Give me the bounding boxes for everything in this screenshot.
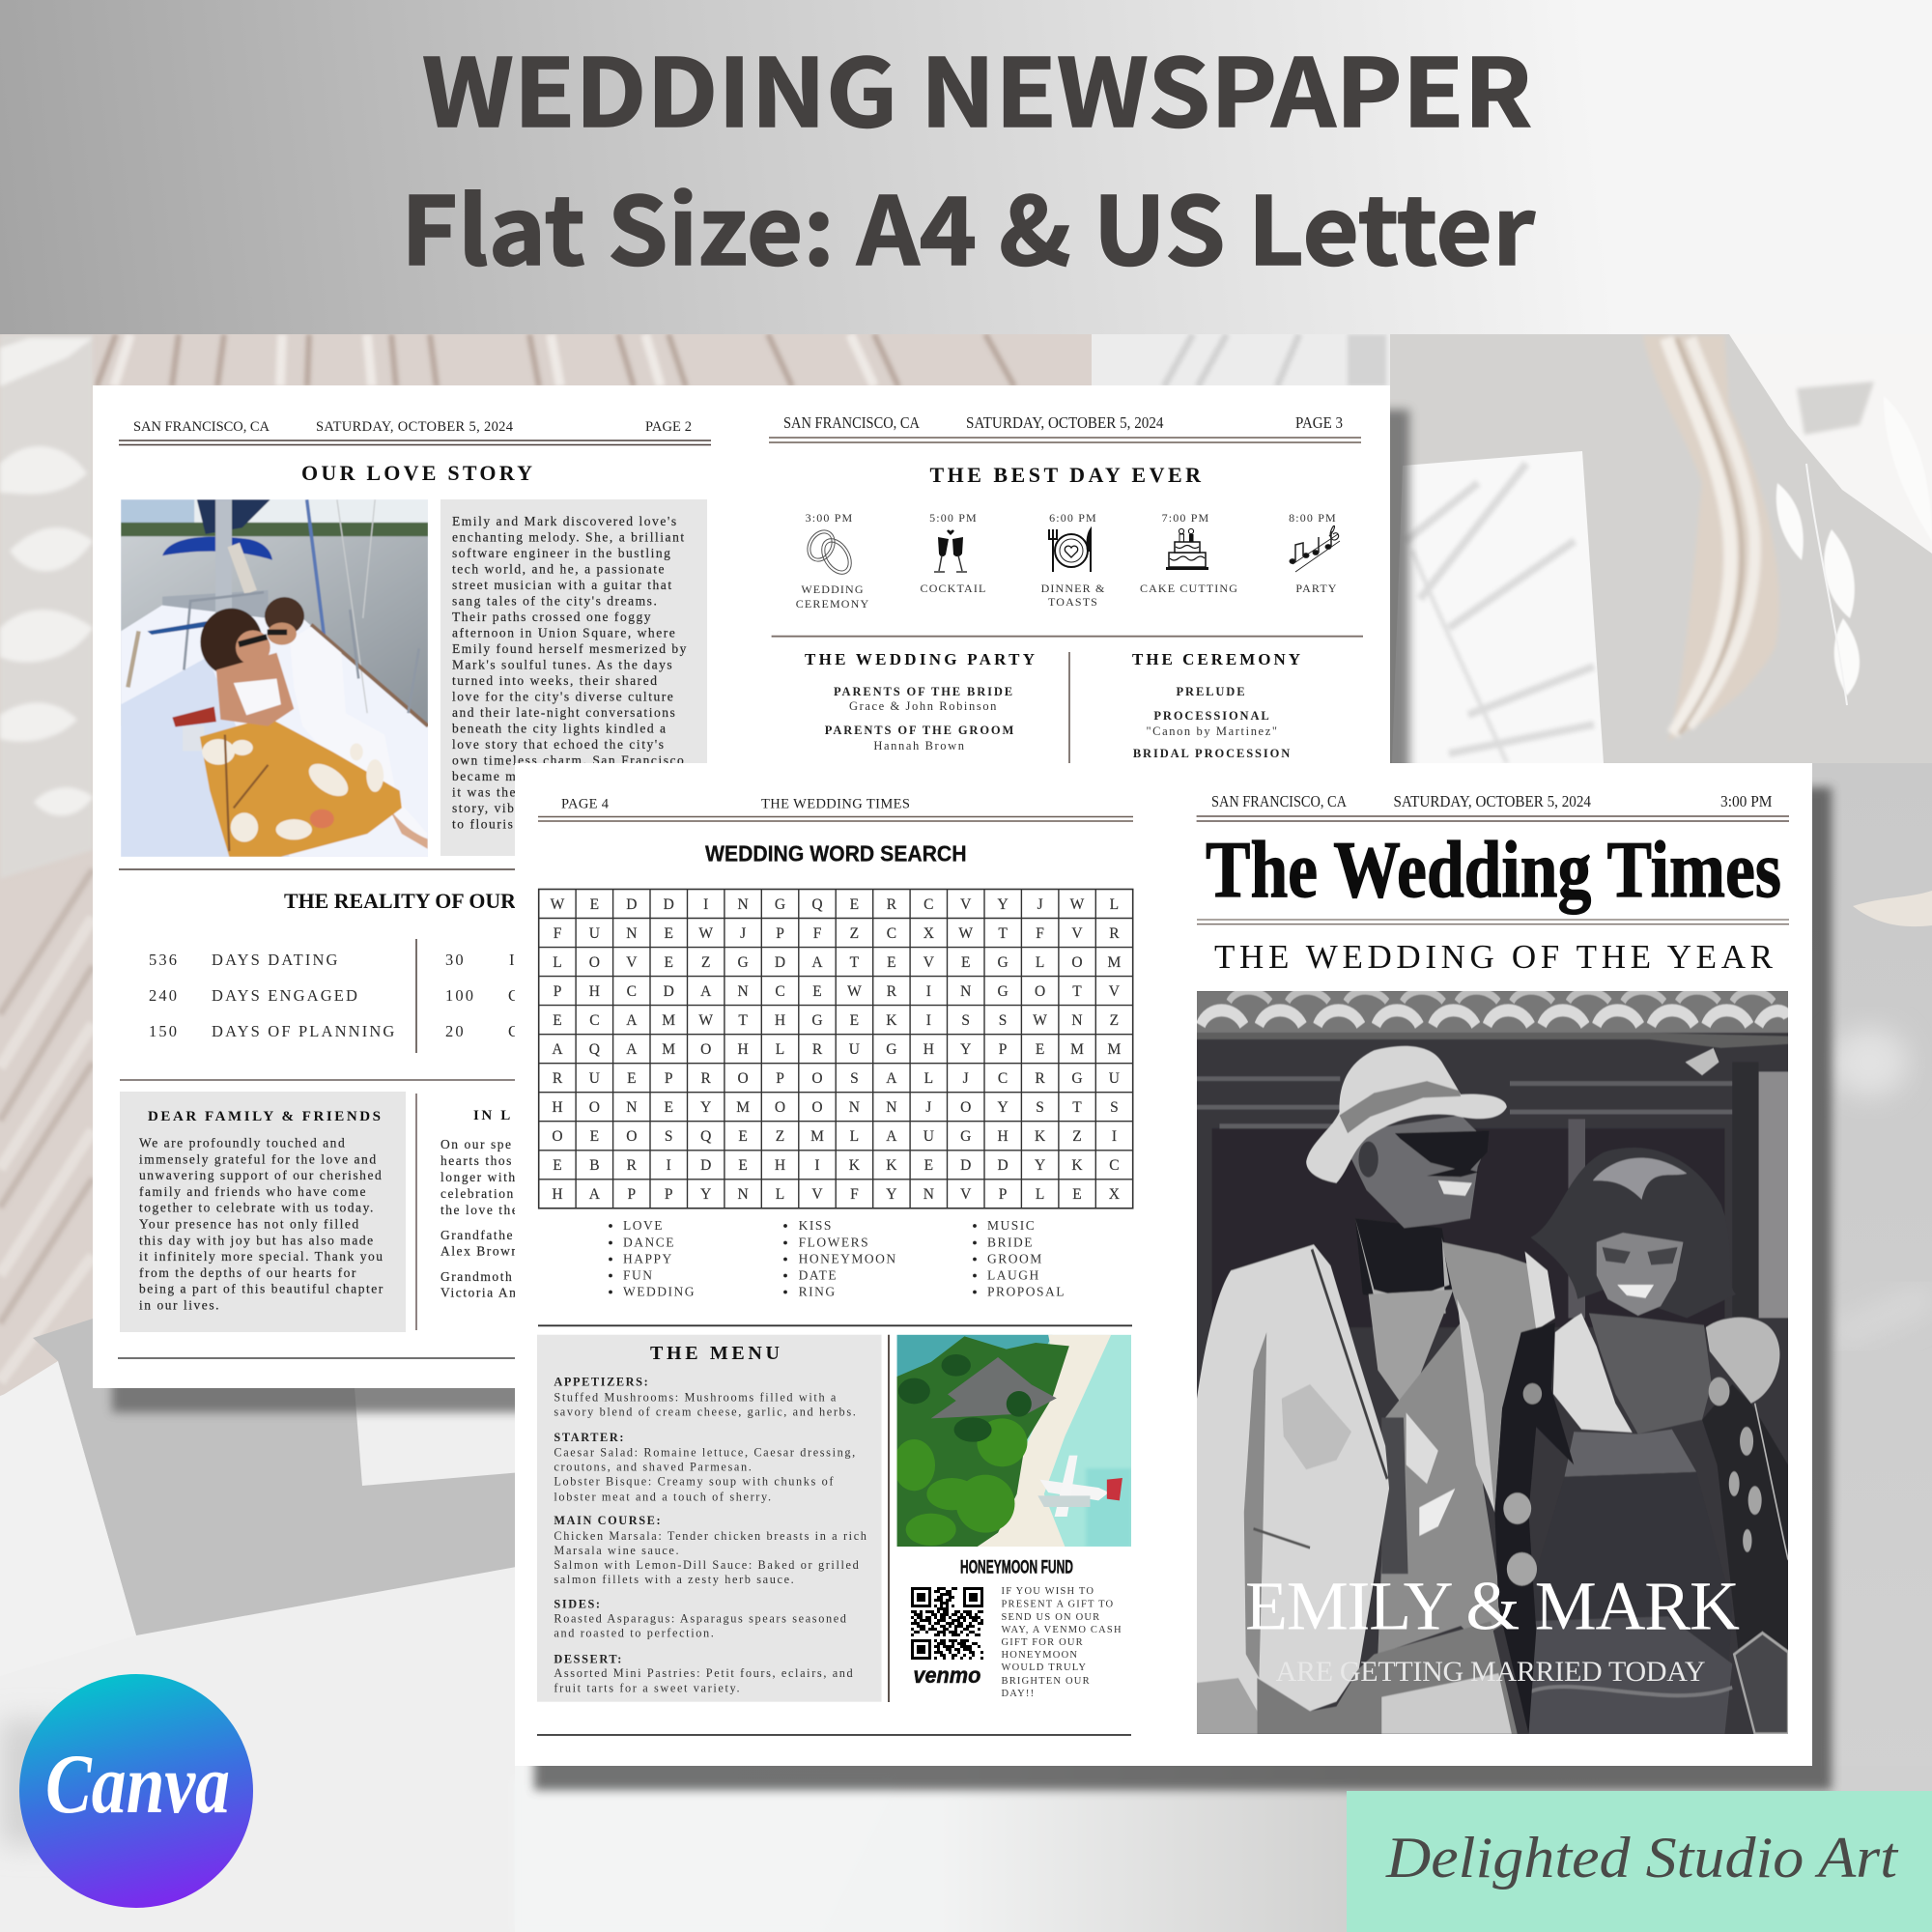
timeline: PARTY — [1295, 582, 1338, 595]
word search grid: HONEYMOONNJOYSTS — [552, 1099, 1119, 1116]
panel: the menu: lobster meat and a touch of sherry. — [554, 1490, 773, 1503]
panel: the menu: Assorted Mini Pastries: Petit fours, eclairs, and — [554, 1666, 854, 1680]
panel: dear family and friends: family and friends who have come — [139, 1184, 367, 1199]
honeymoon fund note: DAY!! — [1001, 1689, 1035, 1699]
timeline: 3:00 PM — [806, 511, 853, 525]
text block: love story: Emily found herself mesmerized by — [452, 641, 688, 656]
page 4 header — [538, 797, 1133, 821]
lower left gray card — [33, 1319, 522, 1635]
page 2 header — [119, 419, 711, 444]
panel: the menu: Stuffed Mushrooms: Mushrooms filled with a — [554, 1390, 838, 1404]
woman's hair — [1530, 1148, 1736, 1318]
honeymoon fund note: WOULD TRULY — [1001, 1662, 1087, 1673]
text block: love story: turned into weeks, their shared — [452, 673, 659, 688]
page 3 header — [769, 413, 1361, 442]
snack tray — [172, 706, 216, 726]
panel: the ceremony: "Canon by Martinez" — [1146, 724, 1279, 738]
panel: the menu: STARTER: — [554, 1431, 625, 1444]
panel: the ceremony: PRELUDE — [1177, 685, 1246, 698]
text block: love story: tech world, and he, a passionate — [452, 562, 666, 576]
woman — [200, 609, 263, 675]
word list: HAPPY — [623, 1251, 673, 1265]
panel: the wedding party: THE WEDDING PARTY — [805, 650, 1035, 668]
page 2 header: PAGE 2 — [645, 419, 692, 435]
panel: the wedding party — [805, 650, 1035, 753]
dress — [1565, 1430, 1696, 1477]
text block: love story — [440, 499, 707, 856]
word search grid: AQAMOHLRUGHYPEMM — [552, 1041, 1122, 1058]
panel: the menu: and roasted to perfection. — [554, 1627, 715, 1640]
beige palm silk — [0, 334, 1092, 1396]
panel: dear family and friends: together to celebrate with us today. — [139, 1201, 375, 1215]
timeline — [796, 511, 1340, 611]
honeymoon fund note: WAY, A VENMO CASH — [1001, 1625, 1122, 1635]
shirt — [1355, 1218, 1450, 1313]
panel: dear family and friends: this day with joy but has also made — [139, 1233, 375, 1247]
roof tiles — [1197, 991, 1788, 1033]
stats list: 240 — [149, 986, 179, 1005]
word list: DANCE — [623, 1236, 675, 1250]
word search grid: ECAMWTHGEKISSWNZ — [553, 1012, 1119, 1029]
panel: dear family and friends: unwavering support of our cherished — [139, 1168, 383, 1182]
text block: love story: and their late-night conversations — [452, 705, 676, 720]
text block: love story: Emily and Mark discovered love's — [452, 514, 678, 528]
honeymoon fund note: IF YOU WISH TO — [1001, 1586, 1094, 1597]
panel: the wedding party: PARENTS OF THE GROOM — [825, 724, 1015, 737]
in loving memory column: hearts thos — [440, 1153, 513, 1168]
page 1 header — [1197, 792, 1789, 821]
hat — [1306, 1046, 1507, 1183]
icon: dinner plate — [1049, 529, 1091, 572]
panel: the menu: fruit tarts for a sweet variety. — [554, 1682, 741, 1695]
trousers — [1257, 1621, 1518, 1734]
doorway — [1212, 1128, 1724, 1327]
face — [1597, 1233, 1683, 1316]
stats list: C — [508, 1022, 521, 1040]
text block: love story: became m — [452, 769, 517, 783]
stats list: 536 — [149, 951, 179, 969]
shadow: back spread — [112, 410, 1409, 1412]
text block: love story: own timeless charm. San Francisco — [452, 753, 685, 767]
timeline: 8:00 PM — [1289, 511, 1337, 525]
word list: MUSIC — [987, 1218, 1036, 1233]
text block: love story: it was the — [452, 784, 517, 800]
white paper with palm shadow — [1392, 451, 1604, 763]
panel: dear family and friends — [120, 1092, 406, 1332]
page 3 header: SATURDAY, OCTOBER 5, 2024 — [966, 413, 1163, 432]
text block: love story: love for the city's diverse culture — [452, 690, 674, 703]
stats list: 100 — [445, 986, 475, 1005]
stats list: DAYS OF PLANNING — [212, 1022, 396, 1040]
panel: the menu: Caesar Salad: Romaine lettuce, Caesar dressing, — [554, 1446, 857, 1460]
panel: the menu: savory blend of cream cheese, garlic, and herbs. — [554, 1406, 857, 1419]
timeline: 6:00 PM — [1049, 511, 1097, 525]
panel: the ceremony — [1132, 650, 1300, 760]
panel: the menu: APPETIZERS: — [554, 1375, 649, 1388]
word search grid: EBRIDEHIKKEDDYKC — [553, 1157, 1120, 1174]
icon: music notes — [1290, 526, 1340, 572]
chest — [1589, 1313, 1712, 1435]
heading: flat size: Flat Size: A4 & US Letter — [401, 156, 1536, 292]
honeymoon fund note: GIFT FOR OUR — [1001, 1637, 1084, 1648]
word list: PROPOSAL — [987, 1285, 1065, 1298]
white leaves at left — [0, 334, 93, 879]
headline: the wedding of the year: THE WEDDING OF THE YEAR — [1214, 938, 1774, 976]
text block: love story: enchanting melody. She, a brilliant — [452, 529, 686, 545]
dried feather — [1643, 335, 1779, 741]
page 2 header: SAN FRANCISCO, CA — [133, 419, 270, 435]
panel: dear family and friends: being a part of this beautiful chapter — [139, 1282, 384, 1296]
word list: GROOM — [987, 1251, 1043, 1265]
word list: BRIDE — [987, 1236, 1034, 1250]
text block: love story: Their paths crossed one foggy — [452, 610, 652, 624]
panel: the wedding party: PARENTS OF THE BRIDE — [834, 685, 1014, 698]
heading: wedding word search: WEDDING WORD SEARCH — [705, 840, 966, 866]
logo: Canva circle — [19, 1674, 253, 1908]
top title band — [0, 0, 1932, 334]
timeline: 7:00 PM — [1162, 511, 1209, 525]
in loving memory column: IN L — [473, 1108, 513, 1123]
honeymoon fund note: PRESENT A GIFT TO — [1001, 1599, 1114, 1609]
text block: love story: afternoon in Union Square, where — [452, 626, 676, 639]
word list: FUN — [623, 1268, 654, 1283]
panel: the wedding party: Grace & John Robinson — [849, 699, 998, 713]
photo: couple on a sailboat — [121, 499, 428, 857]
stats list — [149, 939, 521, 1053]
word search grid: PHCDANCEWRINGOTV — [554, 983, 1121, 1000]
logo: Canva circle: Canva — [45, 1738, 230, 1832]
panel: dear family and friends: in our lives. — [139, 1298, 220, 1312]
page 2 header: SATURDAY, OCTOBER 5, 2024 — [316, 419, 514, 435]
overlay title: Emily & Mark: EMILY & MARK — [1245, 1568, 1740, 1645]
panel: the wedding party: Hannah Brown — [873, 739, 966, 753]
panel: the menu: croutons, and shaved Parmesan. — [554, 1461, 753, 1474]
stats list: C — [508, 986, 521, 1005]
honeymoon fund note — [1001, 1586, 1122, 1699]
top middle pale wall with shadow — [1092, 334, 1401, 392]
timeline: TOASTS — [1048, 595, 1098, 609]
timeline: 5:00 PM — [929, 511, 978, 525]
word list: DATE — [799, 1268, 838, 1283]
venmo logo: venmo — [913, 1662, 980, 1688]
panel: dear family and friends: We are profoundly touched and — [139, 1136, 346, 1150]
panel: the menu: Roasted Asparagus: Asparagus spears seasoned — [554, 1611, 848, 1625]
photo: island beach with seaplane — [894, 1335, 1132, 1548]
icon: champagne glasses — [934, 529, 967, 572]
masthead: the wedding times: The Wedding Times — [1206, 825, 1781, 915]
panel: the menu: SIDES: — [554, 1597, 602, 1610]
in loving memory column: celebration — [440, 1186, 515, 1201]
page 3 header: PAGE 3 — [1295, 413, 1343, 432]
timeline: WEDDING — [801, 582, 865, 596]
page 3 header: SAN FRANCISCO, CA — [783, 413, 920, 432]
word list — [609, 1218, 1065, 1298]
bottom strip — [515, 1766, 1932, 1932]
word search grid: RUEPROPOSALJCRGU — [553, 1070, 1120, 1087]
icon: wedding rings — [802, 526, 858, 580]
panel: the ceremony: BRIDAL PROCESSION — [1133, 747, 1292, 760]
panel: the menu: MAIN COURSE: — [554, 1514, 662, 1527]
heading: the reality of our: THE REALITY OF OUR — [284, 889, 517, 913]
text block: love story: story, vib — [452, 801, 515, 815]
word list: FLOWERS — [799, 1236, 869, 1250]
page 4 header: PAGE 4 — [561, 797, 610, 812]
honeymoon fund note: SEND US ON OUR — [1001, 1612, 1100, 1623]
heading: honeymoon fund: HONEYMOON FUND — [960, 1558, 1073, 1578]
stats list: DAYS DATING — [212, 951, 340, 969]
panel: the ceremony: THE CEREMONY — [1132, 650, 1300, 668]
QR code — [911, 1588, 983, 1658]
word list: RING — [799, 1285, 837, 1298]
word list: LAUGH — [987, 1268, 1040, 1283]
text block: love story: software engineer in the bustling — [452, 546, 671, 560]
heading: our love story: OUR LOVE STORY — [301, 461, 532, 485]
word search grid: WEDDINGQERCVYJWL — [551, 896, 1119, 913]
panel: the menu — [537, 1335, 881, 1702]
word list: WEDDING — [623, 1285, 696, 1298]
text block: love story: sang tales of the city's dreams. — [452, 593, 658, 609]
panel: dear family and friends: immensely grateful for the love and — [139, 1151, 378, 1166]
panel: dear family and friends: it infinitely more special. Thank you — [139, 1249, 384, 1264]
text block: love story: love story that echoed the city's — [452, 737, 665, 752]
seaplane — [1039, 1480, 1109, 1500]
text block: love story: street musician with a guitar that — [452, 578, 673, 592]
gray wall right — [1390, 334, 1932, 769]
white upper right area — [1729, 334, 1932, 554]
logo: Delighted Studio Art badge — [1347, 1791, 1932, 1932]
logo: Delighted Studio Art badge: Delighted Studio Art — [1385, 1826, 1898, 1889]
stats list: 150 — [149, 1022, 179, 1040]
in loving memory column: Alex Brown — [440, 1244, 520, 1258]
photo: black and white couple cover — [1197, 991, 1788, 1734]
panel: dear family and friends: from the depths of our hearts for — [139, 1265, 357, 1280]
honeymoon fund note: HONEYMOON — [1001, 1650, 1078, 1661]
timeline: CAKE CUTTING — [1140, 582, 1238, 595]
honeymoon fund note: BRIGHTEN OUR — [1001, 1676, 1091, 1687]
panel: the menu: salmon fillets with a zesty herb sauce. — [554, 1573, 795, 1586]
page 1 header: 3:00 PM — [1720, 792, 1773, 810]
icon: wedding cake — [1166, 528, 1208, 570]
stats list: 20 — [445, 1022, 466, 1040]
stats list: I — [509, 951, 517, 969]
page 4 header: THE WEDDING TIMES — [761, 797, 910, 812]
clutch — [1734, 1633, 1788, 1734]
text block: love story: Mark's soulful tunes. As the days — [452, 657, 673, 672]
overlay subtitle: ARE GETTING MARRIED TODAY — [1276, 1656, 1706, 1688]
timeline: COCKTAIL — [921, 582, 986, 595]
stats list: DAYS ENGAGED — [212, 986, 359, 1005]
in loving memory column — [440, 1108, 520, 1300]
waistcoat — [1378, 1318, 1508, 1655]
jacket left — [1197, 1244, 1389, 1734]
word search grid — [539, 889, 1133, 1208]
page 1 header: SATURDAY, OCTOBER 5, 2024 — [1393, 792, 1591, 810]
text block: love story: beneath the city lights kindled a — [452, 721, 668, 736]
timeline: CEREMONY — [796, 597, 869, 611]
panel: back spread pages 2 and 3 — [93, 385, 1390, 1388]
panel: the menu: THE MENU — [650, 1343, 780, 1364]
word search grid: HAPPYNLVFYNVPLEX — [552, 1186, 1120, 1203]
text block: love story: to flouris — [452, 817, 514, 831]
word list: HONEYMOON — [799, 1251, 897, 1265]
panel: dear family and friends: DEAR FAMILY & FRIENDS — [148, 1109, 381, 1124]
in loving memory column: On our spe — [440, 1137, 513, 1151]
in loving memory column: longer with — [440, 1170, 517, 1184]
panel: the menu: Marsala wine sauce. — [554, 1544, 680, 1557]
word search grid: LOVEZGDATEVEGLOM — [553, 954, 1122, 971]
in loving memory column: Grandfathe — [440, 1228, 514, 1242]
hand — [1706, 1318, 1779, 1404]
stats list: 30 — [445, 951, 466, 969]
shadow: front spread — [534, 787, 1832, 1790]
right lapel and arm — [1442, 1242, 1555, 1512]
panel: dear family and friends: Your presence has not only filled — [139, 1217, 360, 1231]
panel: the menu: Lobster Bisque: Creamy soup with chunks of — [554, 1475, 835, 1489]
word search grid: OEOSQEZMLAUGHKZI — [552, 1128, 1117, 1145]
woman's skirt — [200, 718, 402, 857]
panel: front spread pages 4 and 1 — [515, 763, 1812, 1766]
panel: the menu: Salmon with Lemon-Dill Sauce: Baked or grilled — [554, 1558, 860, 1572]
cardigan — [1494, 1322, 1574, 1734]
panel: the menu: DESSERT: — [554, 1653, 623, 1666]
timeline: DINNER & — [1041, 582, 1105, 595]
word list: KISS — [799, 1218, 833, 1233]
panel: the menu: Chicken Marsala: Tender chicken breasts in a rich — [554, 1529, 868, 1543]
in loving memory column: the love the — [440, 1203, 519, 1217]
in loving memory column: Grandmoth — [440, 1269, 513, 1284]
page 1 header: SAN FRANCISCO, CA — [1211, 792, 1347, 810]
panel: the ceremony: PROCESSIONAL — [1153, 709, 1271, 723]
in loving memory column: Victoria An — [440, 1285, 517, 1300]
word list: LOVE — [623, 1218, 664, 1233]
man — [311, 626, 342, 757]
heading: the best day ever: THE BEST DAY EVER — [929, 463, 1202, 487]
word search grid: FUNEWJPFZCXWTFVR — [554, 925, 1120, 942]
lower right wall — [1812, 763, 1932, 1791]
man's face and neck — [1355, 1218, 1453, 1304]
white dried leaves — [1776, 396, 1932, 696]
heading: wedding newspaper: WEDDING NEWSPAPER — [422, 17, 1532, 154]
